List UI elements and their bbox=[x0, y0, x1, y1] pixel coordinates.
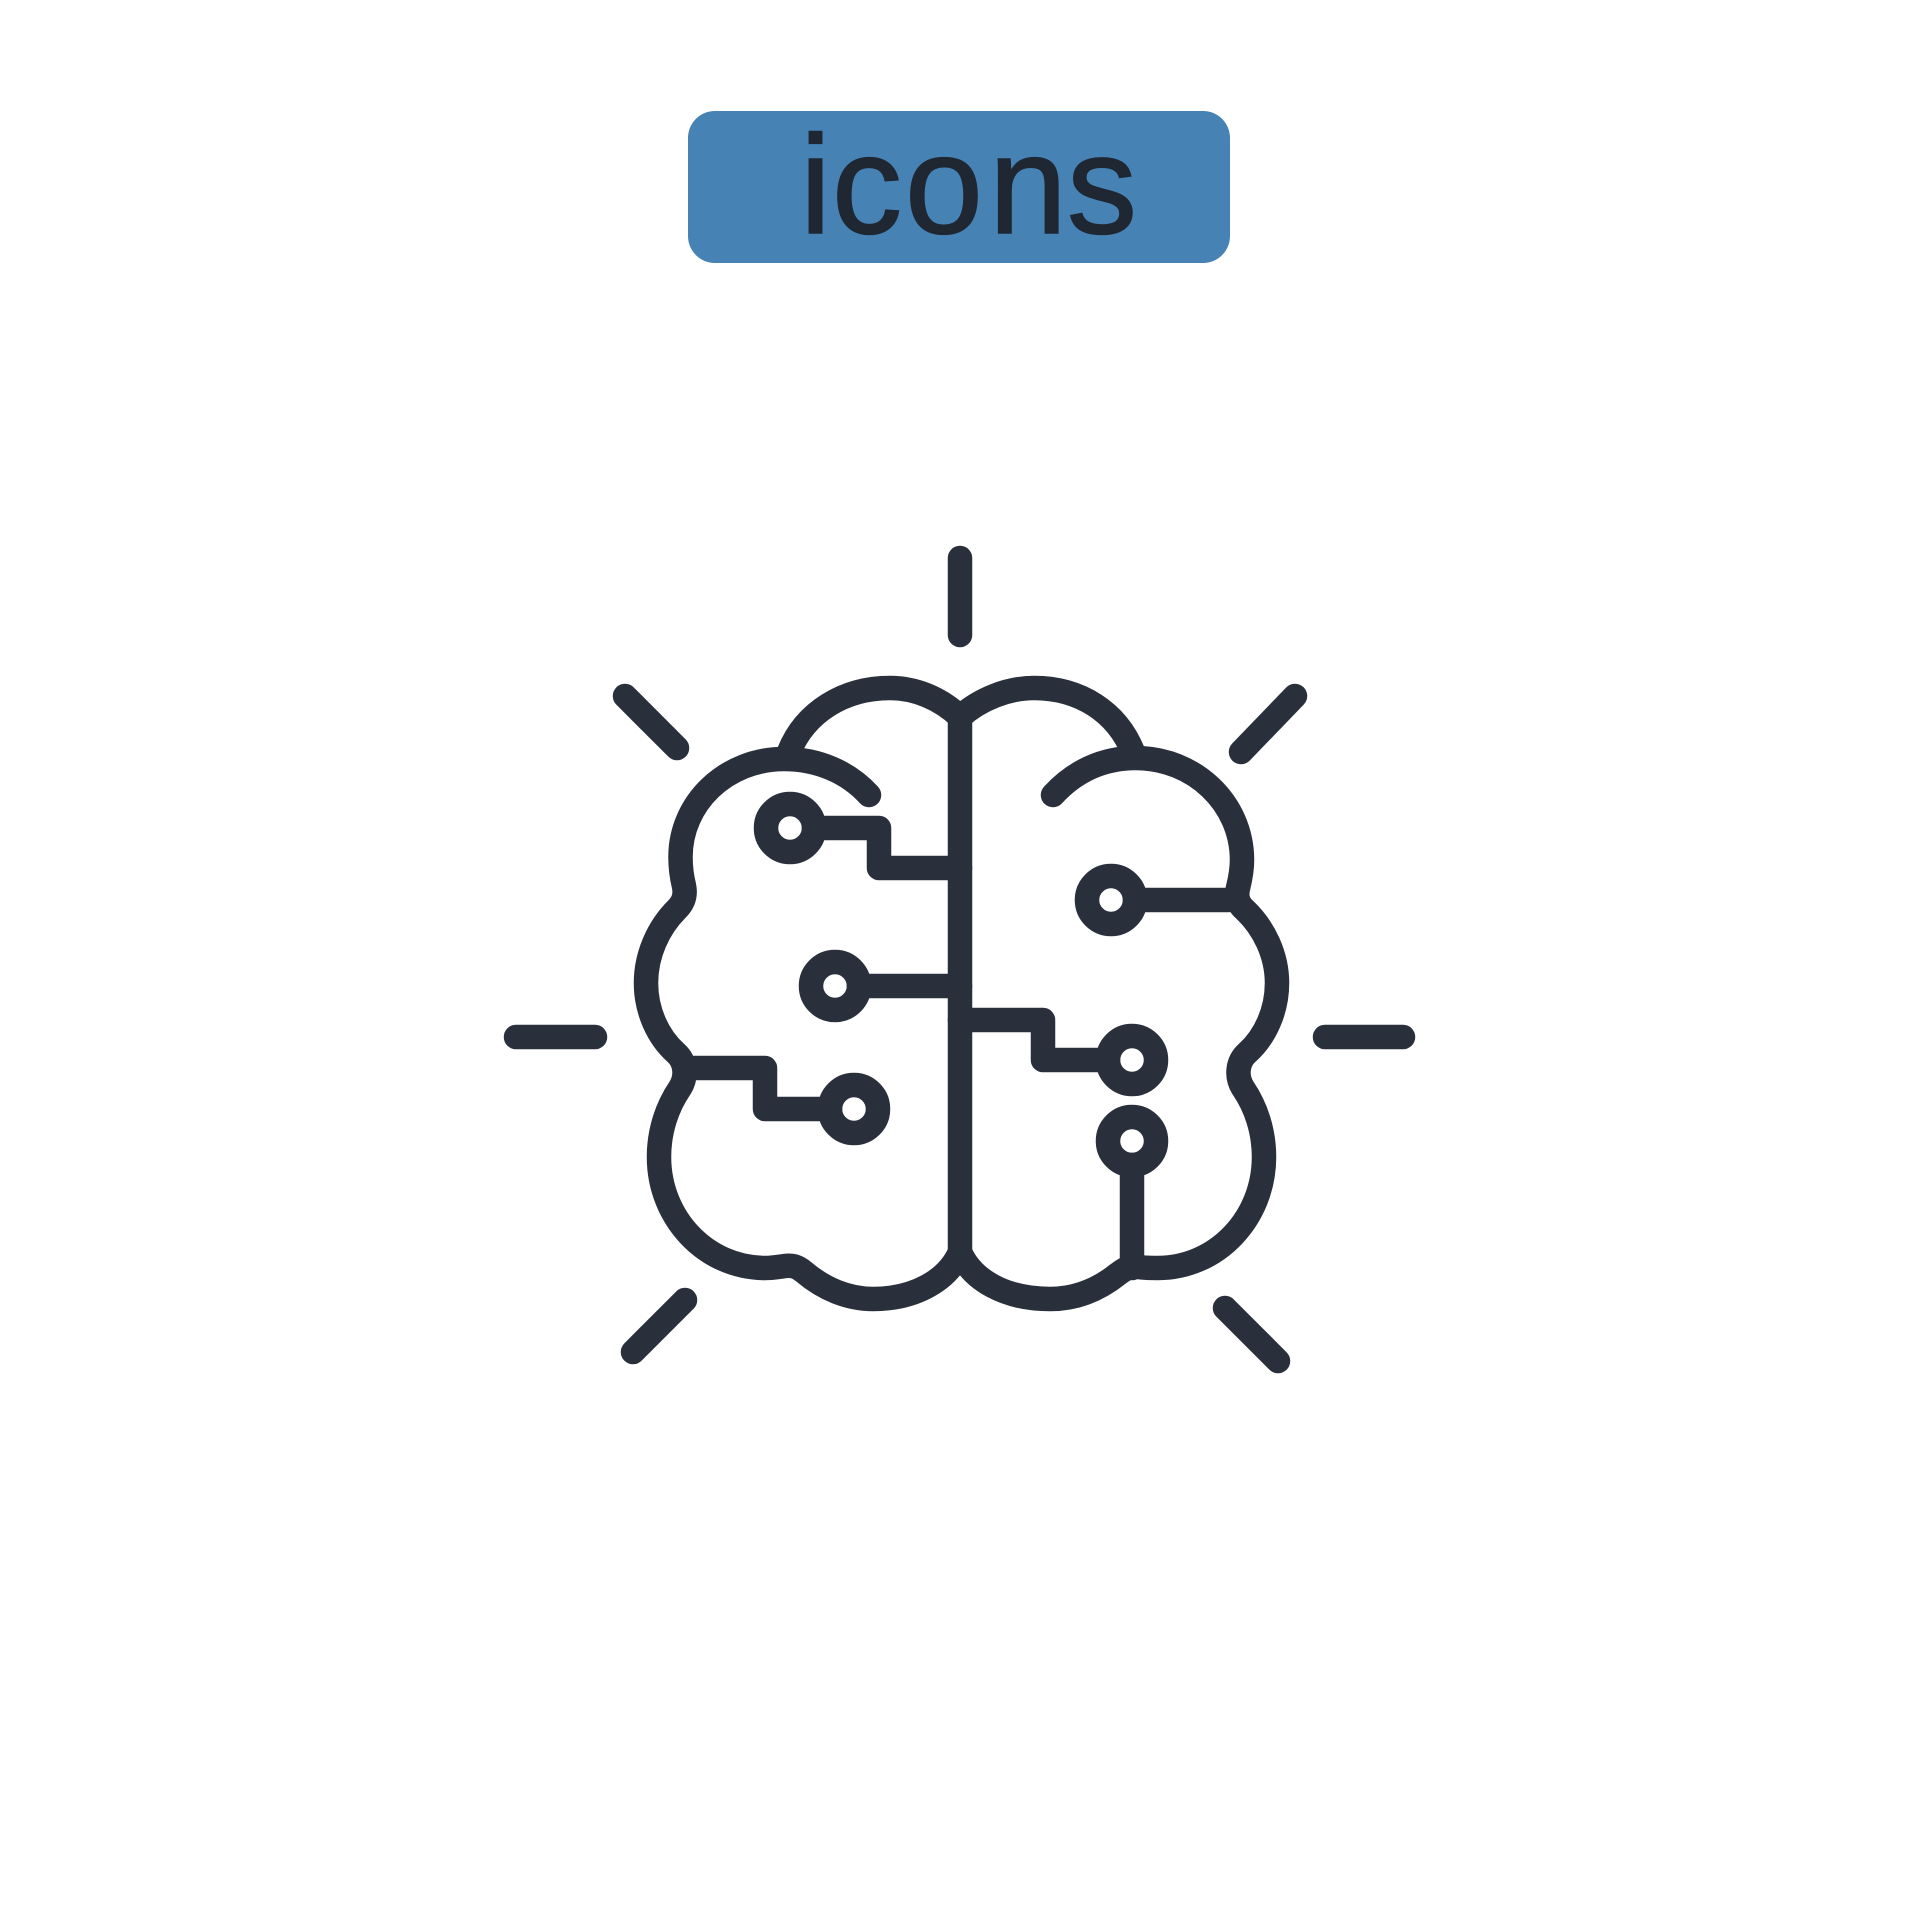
brain left hemisphere outline bbox=[646, 688, 960, 1299]
rays around brain bbox=[516, 558, 1403, 1361]
badge background bbox=[688, 111, 1230, 263]
icon: brain with circuits and rays bbox=[516, 558, 1403, 1361]
badge: icons heading bbox=[688, 106, 1230, 263]
circuit nodes left bbox=[694, 804, 960, 1133]
central divider bbox=[948, 717, 972, 1252]
heading text: icons bbox=[800, 106, 1137, 263]
circuit nodes right bbox=[960, 876, 1228, 1268]
brain right hemisphere outline bbox=[960, 688, 1277, 1299]
